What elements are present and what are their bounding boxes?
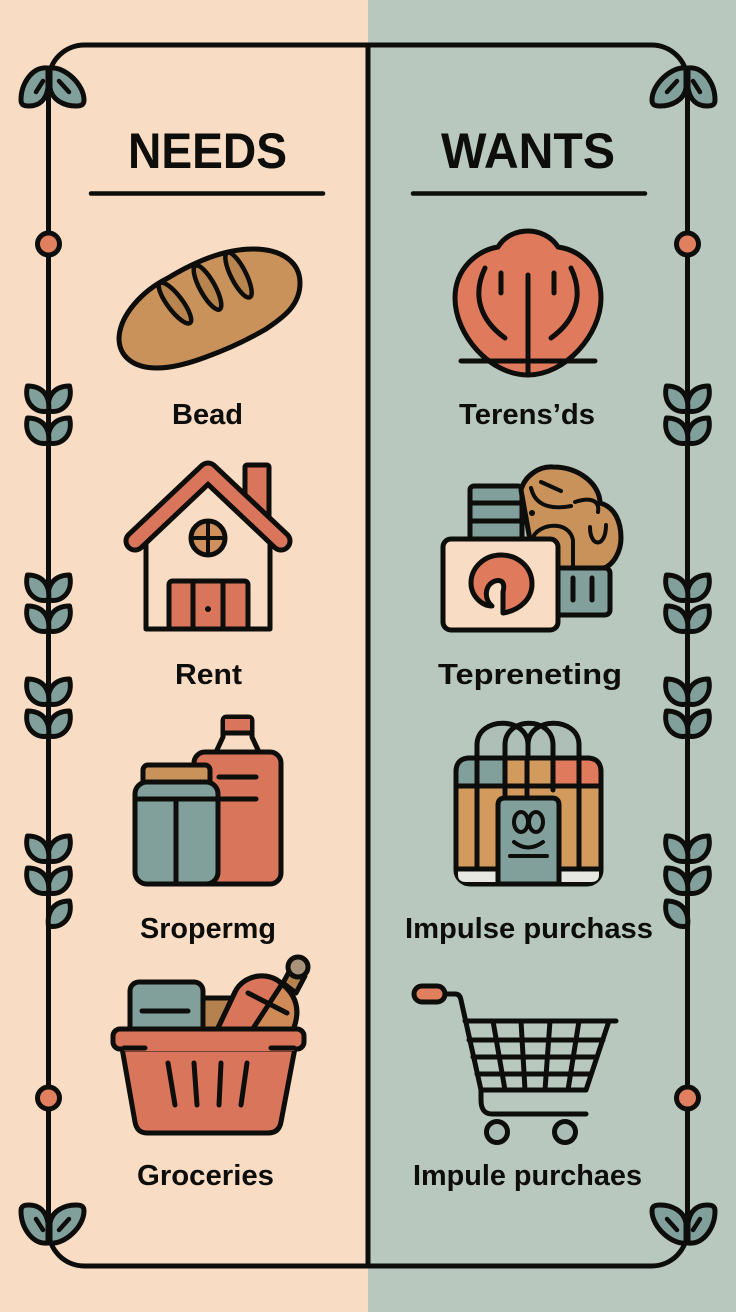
icon: bread <box>119 249 300 368</box>
panel: needs background <box>0 0 368 1312</box>
label: terens'ds: Terens’ds <box>459 399 595 431</box>
icon: shell <box>455 231 601 375</box>
icon: grocery basket <box>113 957 308 1133</box>
icon: house <box>135 465 281 629</box>
heading rule: needs <box>91 191 323 196</box>
label: bead: Bead <box>172 399 243 431</box>
label: impule purchaes: Impule purchaes <box>413 1160 642 1192</box>
icon: shopping cart <box>414 986 616 1142</box>
label: groceries: Groceries <box>137 1160 274 1192</box>
label: sropermg: Sropermg <box>140 913 276 945</box>
label: rent: Rent <box>175 659 242 691</box>
label: tepreneting: Tepreneting <box>438 659 622 691</box>
icon: right vine leaves <box>666 386 709 926</box>
heading rule: wants <box>413 191 645 196</box>
label: impulse purchass: Impulse purchass <box>405 913 653 945</box>
heading: needs: NEEDS <box>128 123 287 179</box>
icon: shopping bags <box>456 723 601 884</box>
icon: card with bread and box <box>443 467 621 630</box>
panel: wants background <box>368 0 736 1312</box>
icon: bottle and jar <box>135 717 281 884</box>
icon: left vine leaves <box>27 386 70 926</box>
icon: frame dots <box>38 233 698 1109</box>
heading: wants: WANTS <box>441 123 615 179</box>
